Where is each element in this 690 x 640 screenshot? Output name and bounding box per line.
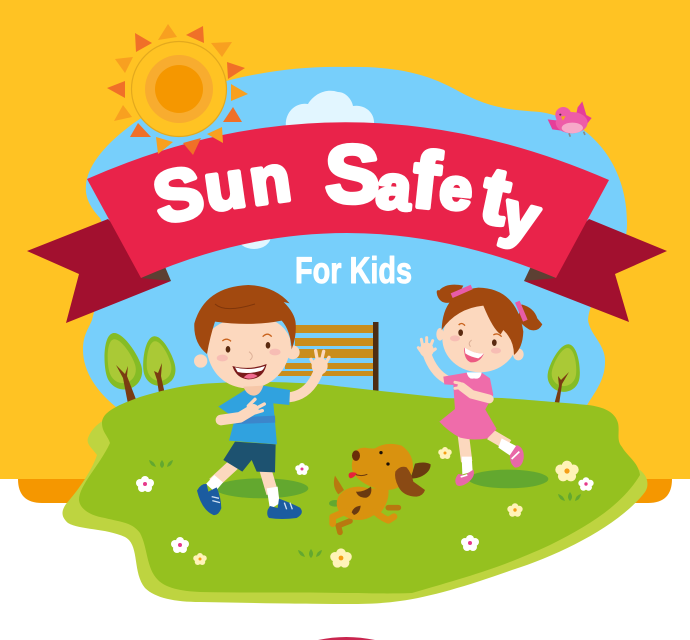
cloud: lower <box>237 223 271 249</box>
orange tabs under band <box>18 479 672 503</box>
boy: socks <box>206 475 280 509</box>
dog: head <box>352 444 413 490</box>
flower: cream small 2 <box>438 447 452 459</box>
boy: ears <box>194 345 300 368</box>
girl: raised arm and hand <box>418 338 447 380</box>
girl: socks <box>462 438 517 474</box>
tree: left <box>95 328 147 404</box>
boy: shoes <box>197 484 302 519</box>
bird <box>548 101 592 137</box>
subtitle: For Kids <box>295 250 412 291</box>
girl <box>418 285 548 488</box>
flower: cream small 1 <box>193 553 207 565</box>
boy: face details <box>217 334 281 379</box>
sun disc <box>132 42 226 136</box>
flower: white 3 <box>171 537 189 553</box>
sky blob <box>83 67 627 407</box>
title: a <box>374 152 415 224</box>
tree: middle <box>138 334 178 400</box>
flower: white 2 <box>295 463 309 475</box>
boy: legs <box>213 463 272 493</box>
boy: head <box>206 317 290 388</box>
boy: chest arm and hand <box>221 399 264 420</box>
yellow background band <box>0 0 690 479</box>
flower: cream large 2 <box>555 461 579 481</box>
tree: right <box>545 342 585 405</box>
girl: hair <box>442 288 523 355</box>
girl: face details <box>450 323 502 362</box>
dog: body <box>337 487 389 520</box>
boy: ground shadow <box>215 478 308 498</box>
dog: nose <box>352 450 360 461</box>
park bench <box>278 322 378 397</box>
girl: chest arm and hand <box>455 382 489 399</box>
flower: cream small 3 <box>507 503 523 517</box>
sun <box>107 24 248 155</box>
title: e <box>437 155 476 223</box>
title: t <box>473 150 518 242</box>
girl: legs <box>463 434 508 462</box>
flower: white 1 <box>136 476 154 492</box>
girl: shoes <box>455 445 524 486</box>
boy: hair <box>194 285 296 354</box>
girl: hair bands <box>452 287 525 321</box>
dog: near legs <box>333 512 394 524</box>
cloud: top <box>286 91 374 132</box>
title: S <box>147 151 210 240</box>
grass tuft: left <box>149 460 173 468</box>
girl: head <box>442 304 518 372</box>
ribbon: main banner <box>87 122 609 278</box>
grass tuft: right <box>558 492 581 501</box>
ribbon: right fold <box>524 262 556 281</box>
boy: waving arm <box>289 351 329 397</box>
ribbon: left tail <box>27 219 171 323</box>
grass island: main <box>79 382 640 593</box>
sun rays <box>107 24 248 155</box>
flower: white 4 <box>461 535 479 551</box>
girl: ground shadow <box>468 470 548 488</box>
boy: hair highlight <box>215 304 255 309</box>
dog: spots <box>352 487 371 515</box>
boy: shirt <box>218 386 290 444</box>
boy: shirt stripe <box>236 416 275 424</box>
dog: tail <box>334 476 344 494</box>
dog: eyes <box>379 451 390 466</box>
title: y <box>495 179 547 255</box>
girl: left pigtail <box>437 285 463 303</box>
grass island: light edge <box>62 420 647 604</box>
dog: mouth and tongue <box>349 472 367 478</box>
flower: white 5 <box>578 477 594 491</box>
next section peek <box>318 637 375 640</box>
boy: neck <box>243 386 263 396</box>
dog <box>329 444 431 532</box>
title: u <box>200 146 250 225</box>
dog: far ear <box>411 462 431 478</box>
title: f <box>408 134 444 226</box>
girl: skirt <box>439 409 497 440</box>
dog: ground shadow <box>329 500 341 507</box>
girl: bodice <box>443 373 493 410</box>
girl: collar <box>467 372 482 379</box>
title: S <box>325 129 380 220</box>
dog: near ear <box>395 467 425 497</box>
grass tuft: centre <box>298 549 322 558</box>
girl: ears <box>436 328 524 360</box>
title: n <box>245 140 295 219</box>
dog: far legs <box>338 508 398 532</box>
flower: cream large 1 <box>330 548 352 568</box>
ribbon: left fold <box>141 262 171 281</box>
boy: shorts <box>223 442 276 472</box>
girl: right pigtail <box>517 304 542 330</box>
ribbon: right tail <box>524 219 667 322</box>
boy <box>194 285 329 519</box>
